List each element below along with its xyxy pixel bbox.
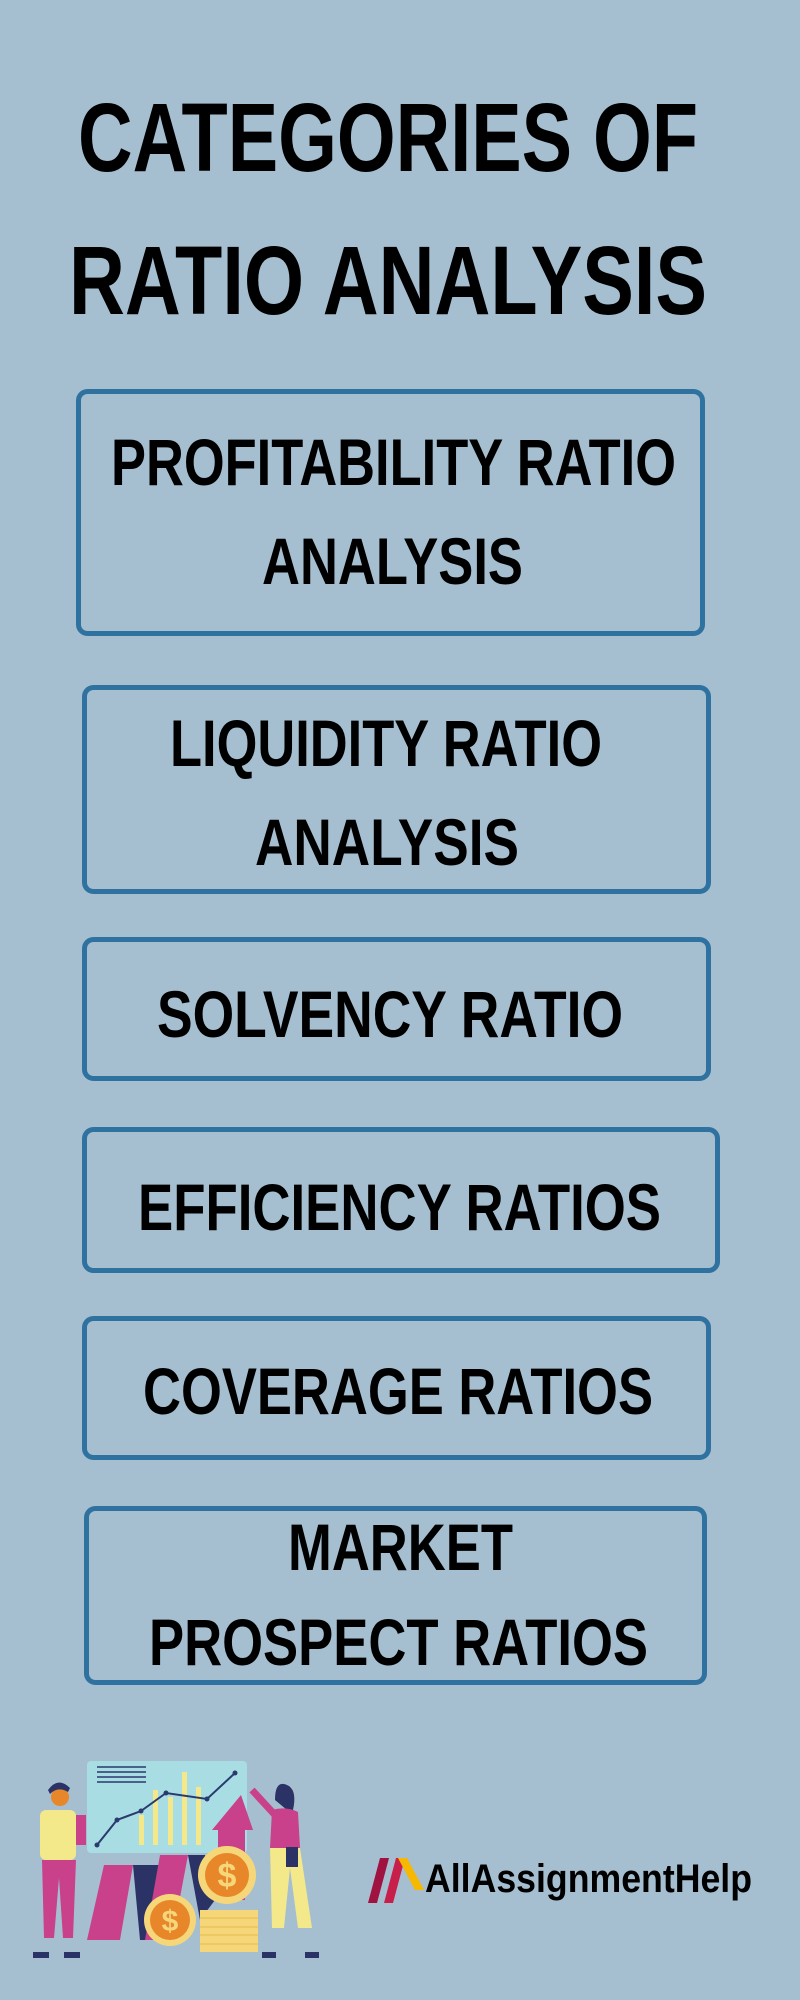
box: coverage [84, 1318, 708, 1458]
box: efficiency [84, 1130, 718, 1270]
box: solvency: SOLVENCY RATIO [157, 977, 623, 1051]
box: coverage: COVERAGE RATIOS [143, 1354, 653, 1428]
illustration: business chart [33, 1761, 319, 1958]
woman [276, 1786, 294, 1804]
illustration: business chart: $ [162, 1905, 179, 1938]
box: solvency [84, 940, 708, 1078]
box: market prospect: MARKET [288, 1510, 513, 1584]
title [69, 83, 707, 335]
box: liquidity [84, 688, 708, 892]
arrow [218, 1830, 245, 1900]
box: profitability [78, 392, 702, 634]
logo: AllAssignmentHelp [425, 1857, 752, 1901]
box: liquidity: ANALYSIS [255, 805, 519, 879]
zigzag [87, 1865, 133, 1940]
illustration: business chart: $ [218, 1857, 237, 1895]
box: market prospect [86, 1508, 704, 1682]
box: efficiency: EFFICIENCY RATIOS [138, 1170, 661, 1244]
box: profitability: ANALYSIS [262, 524, 523, 598]
man [51, 1788, 69, 1806]
box: liquidity: LIQUIDITY RATIO [170, 706, 602, 780]
box: market prospect: PROSPECT RATIOS [149, 1605, 648, 1679]
coins [200, 1910, 258, 1952]
